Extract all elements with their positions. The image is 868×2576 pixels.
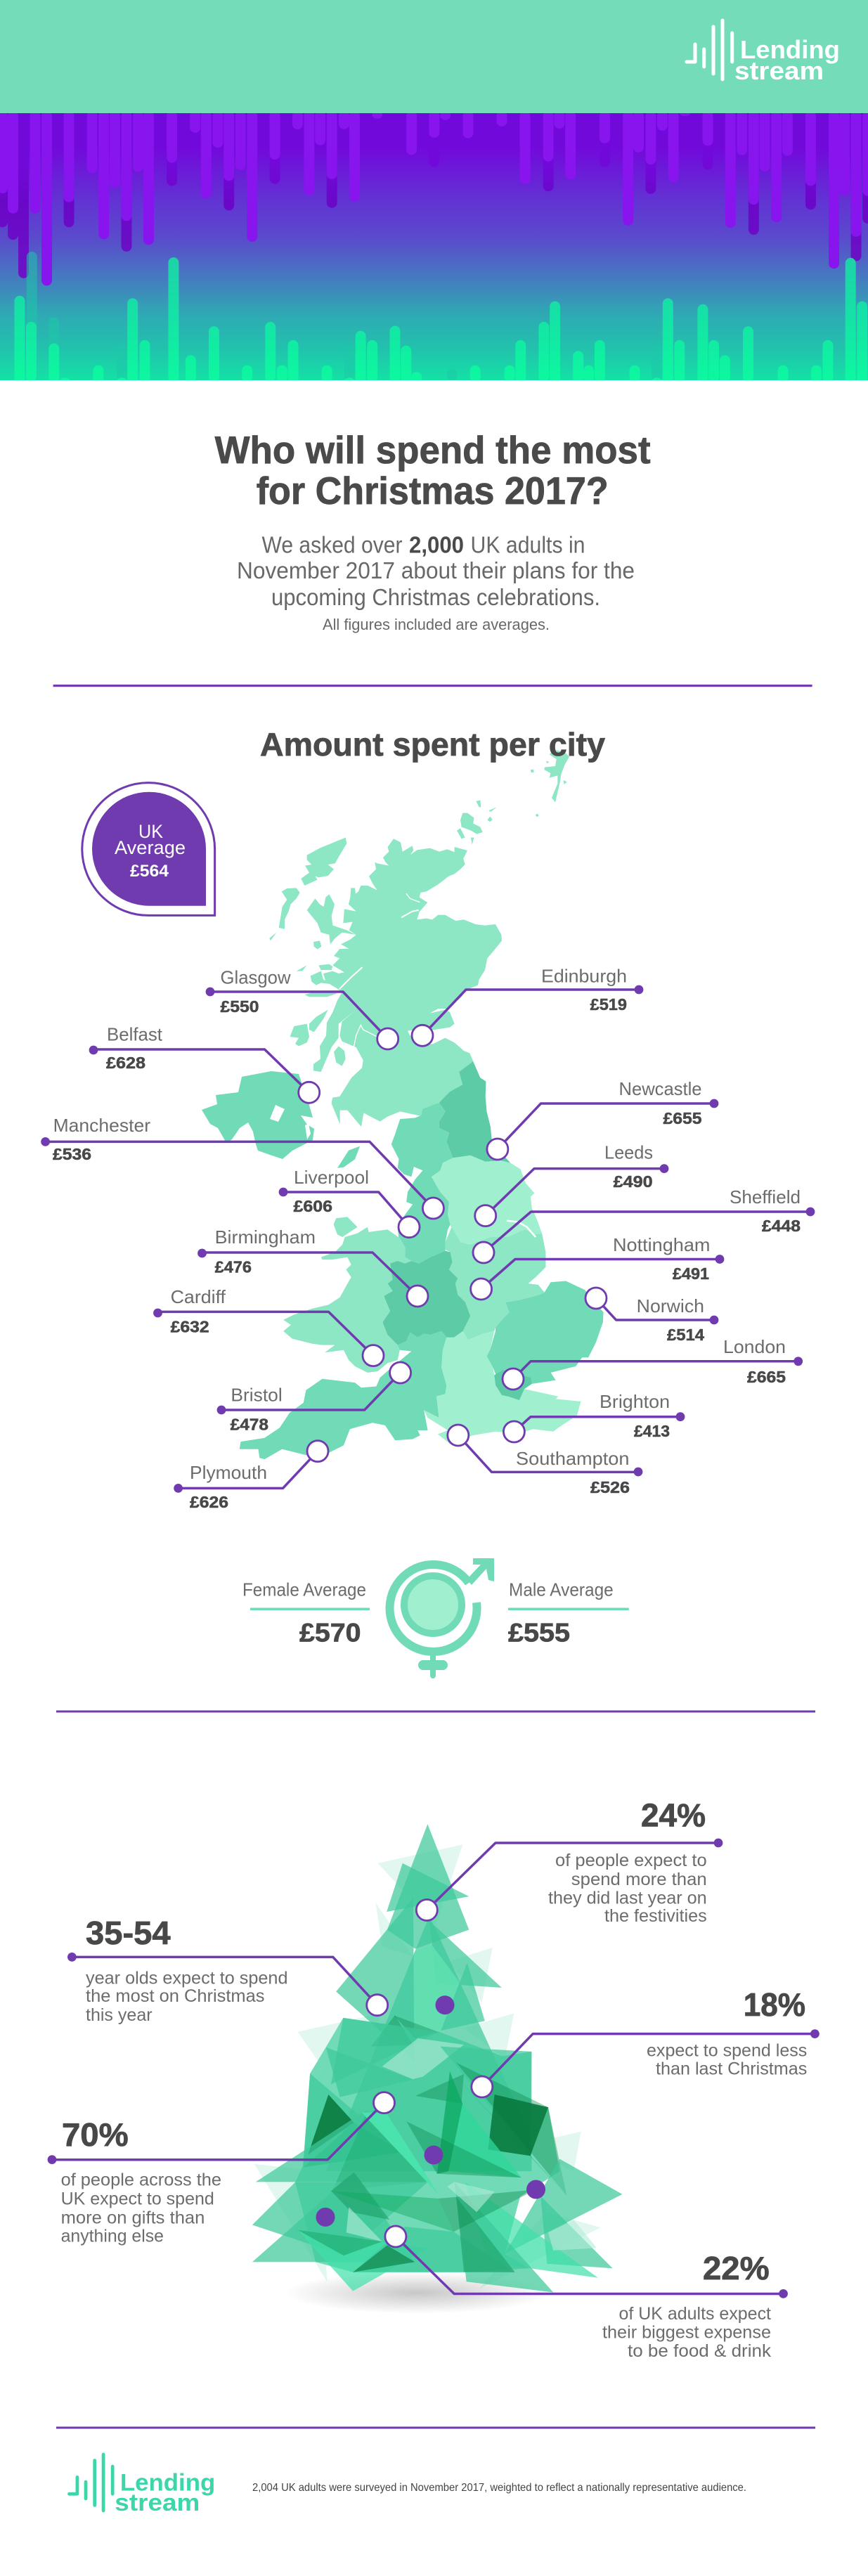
callout: Manchester (41, 1115, 443, 1219)
callout: Liverpool (279, 1167, 420, 1238)
callout: Belfast: £628 (106, 1054, 145, 1072)
callout: Nottingham: Nottingham (613, 1234, 710, 1255)
callout: Bristol: £478 (231, 1415, 268, 1433)
stat: 18%: 18% (744, 1986, 805, 2023)
callout: Sheffield (473, 1186, 815, 1263)
logo: Lending Stream header: Lending (740, 35, 840, 64)
callout: Plymouth: Plymouth (190, 1462, 267, 1483)
callout: Manchester: £536 (53, 1145, 91, 1163)
stat: 22%: 22% (703, 2250, 770, 2286)
title: Who will spend the most (215, 428, 651, 472)
heading: amount spent per city: Amount spent per city (260, 726, 605, 763)
banner: dripping gradient bars (0, 113, 868, 380)
stat: 22%: to be food & drink (628, 2341, 772, 2361)
callout: Brighton: £413 (634, 1422, 670, 1440)
callout: Bristol (217, 1362, 411, 1433)
callout: Cardiff: Cardiff (171, 1286, 226, 1307)
callout: Southampton (448, 1425, 642, 1496)
male average: £555 (508, 1618, 570, 1647)
stat: 24%: 24% (641, 1797, 706, 1834)
stat: 22% (385, 2226, 788, 2361)
callout: Leeds (475, 1142, 668, 1226)
male average (508, 1579, 629, 1647)
callout: Norwich: Norwich (637, 1295, 704, 1316)
uk average pin (82, 783, 215, 915)
uk average pin: £564 (130, 862, 169, 881)
stat: 24%: the festivities (604, 1906, 707, 1926)
stat: 22%: of UK adults expect (618, 2304, 771, 2324)
callout: Newcastle: Newcastle (618, 1078, 701, 1099)
stat: 35-54 (67, 1915, 388, 2025)
callout: Glasgow: £550 (221, 997, 259, 1016)
stat: 18% (472, 1986, 820, 2097)
logo: Lending Stream header: stream (734, 56, 824, 85)
intro text: UK adults in (471, 532, 585, 558)
callout: London: £665 (747, 1368, 786, 1386)
callout: Cardiff: £632 (171, 1317, 209, 1335)
callout: Sheffield: £448 (762, 1217, 801, 1235)
uk average pin: UK (138, 821, 163, 842)
intro text: November 2017 about their plans for the (237, 557, 635, 583)
logo: Lending Stream header (687, 20, 840, 85)
callout: Birmingham (197, 1226, 428, 1307)
callout: Cardiff (153, 1286, 384, 1366)
ornaments (316, 1995, 545, 2227)
callout: Southampton: Southampton (516, 1448, 630, 1469)
callout: Liverpool: Liverpool (294, 1167, 369, 1188)
stat: 35-54: this year (86, 2005, 153, 2025)
callout: Newcastle (487, 1078, 718, 1160)
tree shadow (284, 2272, 551, 2314)
callout: Edinburgh (412, 966, 643, 1046)
female average: Female Average (242, 1579, 366, 1600)
stat: 70%: more on gifts than (61, 2208, 205, 2227)
stat: 24% (416, 1797, 723, 1926)
header band (0, 0, 868, 113)
logo: Lending Stream footer: Lending (120, 2469, 215, 2496)
callout: Nottingham: £491 (673, 1264, 709, 1283)
footnote: 2,004 UK adults were surveyed in November 2017, weighted to reflect a nationally representative audience. (252, 2482, 746, 2494)
title (215, 428, 651, 512)
intro text (237, 532, 635, 633)
callout: Newcastle: £655 (663, 1109, 702, 1127)
callout: Norwich (585, 1288, 718, 1344)
callout: Manchester: Manchester (53, 1115, 150, 1136)
callout: Belfast: Belfast (107, 1023, 163, 1044)
stat: 70%: 70% (62, 2116, 129, 2153)
map of the UK (202, 750, 604, 1459)
stat: 35-54: year olds expect to spend (86, 1969, 288, 1988)
title: for Christmas 2017? (257, 469, 609, 512)
callout: Liverpool: £606 (294, 1197, 332, 1215)
stat: 24%: they did last year on (548, 1889, 707, 1908)
callout: Edinburgh: Edinburgh (541, 966, 627, 987)
stat: 70%: anything else (61, 2227, 164, 2246)
christmas tree illustration (252, 1824, 622, 2292)
logo: Lending Stream footer: stream (115, 2490, 200, 2516)
stat: 70%: UK expect to spend (61, 2189, 214, 2209)
callout: Birmingham: Birmingham (215, 1226, 316, 1248)
callout: Norwich: £514 (667, 1326, 704, 1344)
callout: Sheffield: Sheffield (730, 1186, 801, 1208)
stat: 18%: expect to spend less (647, 2041, 807, 2061)
map: England and Wales regions (240, 1061, 604, 1459)
callout: Leeds: Leeds (604, 1142, 653, 1163)
stat: 24%: spend more than (571, 1870, 707, 1889)
callout: Nottingham (471, 1234, 724, 1300)
callout: Glasgow (206, 967, 399, 1049)
callout: Birmingham: £476 (215, 1258, 252, 1276)
callout: London (503, 1336, 803, 1390)
intro text: All figures included are averages. (323, 616, 550, 633)
map: Northern Ireland (202, 1071, 314, 1159)
icon: gender symbol (390, 1558, 494, 1676)
logo: Lending Stream footer (70, 2454, 215, 2516)
stat: 18%: than last Christmas (656, 2059, 807, 2079)
intro text: 2,000 (409, 532, 464, 558)
stat: 35-54: 35-54 (86, 1915, 171, 1951)
intro text: We asked over (261, 532, 403, 558)
female average: £570 (299, 1618, 361, 1647)
intro text: upcoming Christmas celebrations. (271, 584, 600, 610)
callout: Brighton (503, 1391, 685, 1442)
stat: 35-54: the most on Christmas (86, 1986, 264, 2006)
stat: 70% (48, 2092, 394, 2246)
callout: Plymouth (174, 1441, 328, 1511)
uk average pin: Average (115, 837, 186, 858)
callout: Belfast (89, 1023, 320, 1103)
callout: Brighton: Brighton (600, 1391, 670, 1412)
callout: Bristol: Bristol (231, 1385, 283, 1406)
callout: Glasgow: Glasgow (221, 967, 291, 988)
stat: 22%: their biggest expense (602, 2322, 771, 2342)
callout: Edinburgh: £519 (590, 995, 627, 1014)
callout: Plymouth: £626 (190, 1493, 228, 1511)
callout: London: London (723, 1336, 786, 1357)
male average: Male Average (509, 1579, 614, 1600)
stat: 24%: of people expect to (555, 1851, 707, 1870)
callout: Southampton: £526 (590, 1478, 630, 1496)
callout: Leeds: £490 (614, 1172, 653, 1191)
map: Scotland and islands (269, 750, 569, 1127)
stat: 70%: of people across the (61, 2170, 221, 2189)
female average (242, 1579, 370, 1647)
